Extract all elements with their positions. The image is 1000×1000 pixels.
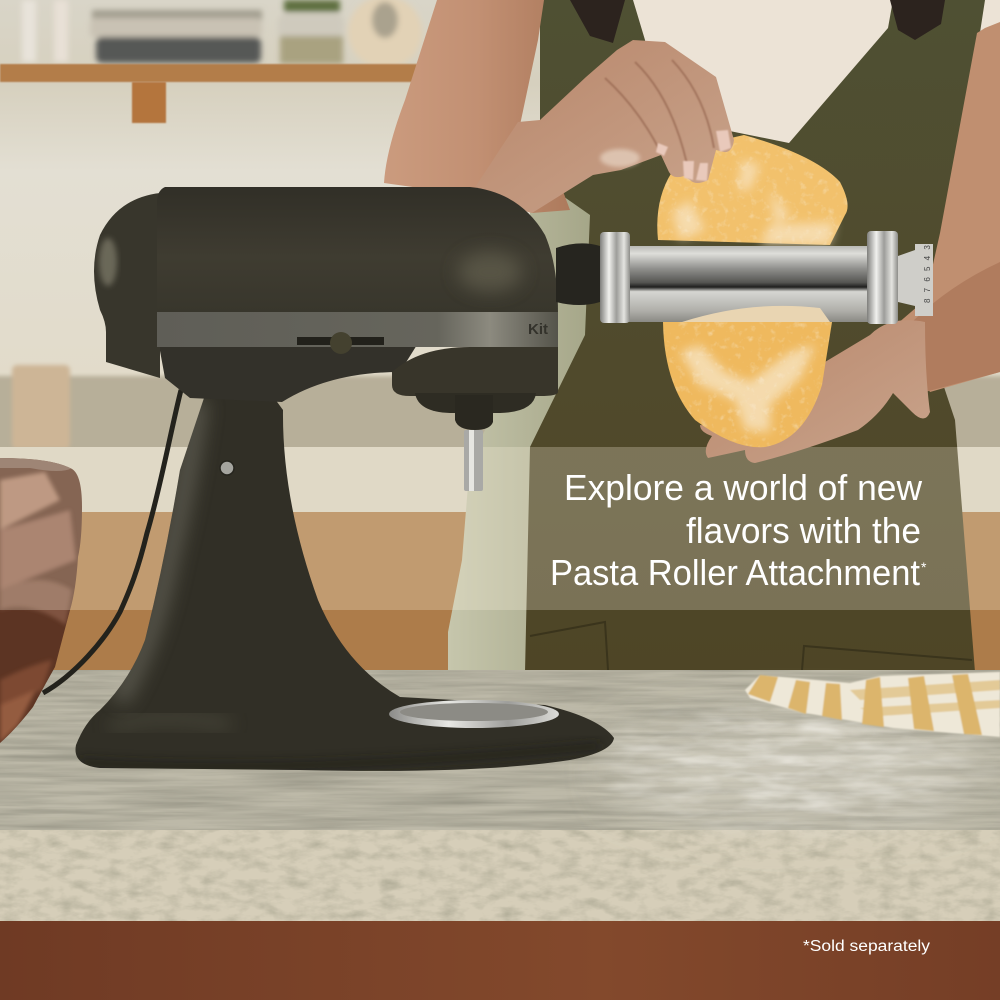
person: shirt, apron and arms — [384, 0, 1000, 672]
wood front edge — [0, 921, 1000, 1000]
blurred back counter stone — [0, 376, 1000, 452]
speed knob — [330, 332, 352, 354]
planetary hub — [392, 347, 558, 396]
neck under the head — [158, 340, 420, 402]
column bolt — [220, 461, 234, 475]
upper hand — [470, 40, 734, 213]
caption text: Pasta Roller Attachment — [550, 552, 920, 593]
right collar — [867, 231, 898, 324]
attachment hub neck — [556, 243, 600, 305]
bowl ring on base — [389, 700, 559, 728]
lower dough sheet — [663, 322, 832, 447]
wood cabinet — [0, 512, 1000, 672]
column highlight — [80, 400, 600, 766]
background wall — [0, 0, 1000, 380]
stand mixer — [76, 187, 614, 771]
right arm — [890, 22, 1000, 392]
power cord — [43, 390, 181, 693]
arm shadow — [912, 262, 1000, 392]
adjustment knob — [898, 244, 933, 316]
caption text: Explore a world of new — [564, 467, 923, 508]
beater shaft — [455, 395, 493, 430]
lower hand — [700, 320, 930, 463]
head body — [157, 187, 558, 314]
caption text: flavors with the — [686, 510, 921, 551]
wooden bowl — [0, 458, 82, 743]
grey trim band — [157, 312, 558, 347]
upper left arm — [384, 0, 570, 213]
cream counter — [0, 447, 1000, 513]
mixer base and column — [76, 395, 614, 771]
upper dough sheet — [657, 135, 848, 245]
light trouser panel — [448, 170, 600, 672]
hair — [570, 0, 945, 43]
footnote: *Sold separately — [803, 938, 930, 955]
beater pin — [464, 430, 483, 491]
cream shirt — [540, 0, 1000, 150]
stone countertop — [0, 670, 1000, 922]
fingernails — [656, 130, 731, 181]
caption text — [550, 467, 927, 593]
striped towel — [745, 672, 1000, 737]
pasta roller attachment — [600, 231, 933, 324]
apron pockets — [530, 622, 972, 670]
flour specks on dough — [655, 130, 850, 450]
left collar — [600, 232, 630, 323]
caption text: * — [921, 559, 927, 575]
brand mark on trim: Kit — [528, 321, 548, 338]
finger creases — [605, 60, 714, 178]
flour on lower dough — [680, 345, 815, 432]
flour on roller — [682, 306, 830, 322]
wall shelf with dishes — [0, 0, 422, 123]
blurred canister — [12, 365, 70, 449]
translucent caption band — [0, 447, 1000, 610]
flour on palm — [600, 149, 640, 167]
knob numbers: 8 7 6 5 4 3 — [923, 243, 932, 303]
flour on upper dough — [672, 160, 835, 245]
rear dome — [94, 193, 160, 378]
speed slider — [297, 337, 384, 345]
olive apron — [525, 0, 985, 672]
